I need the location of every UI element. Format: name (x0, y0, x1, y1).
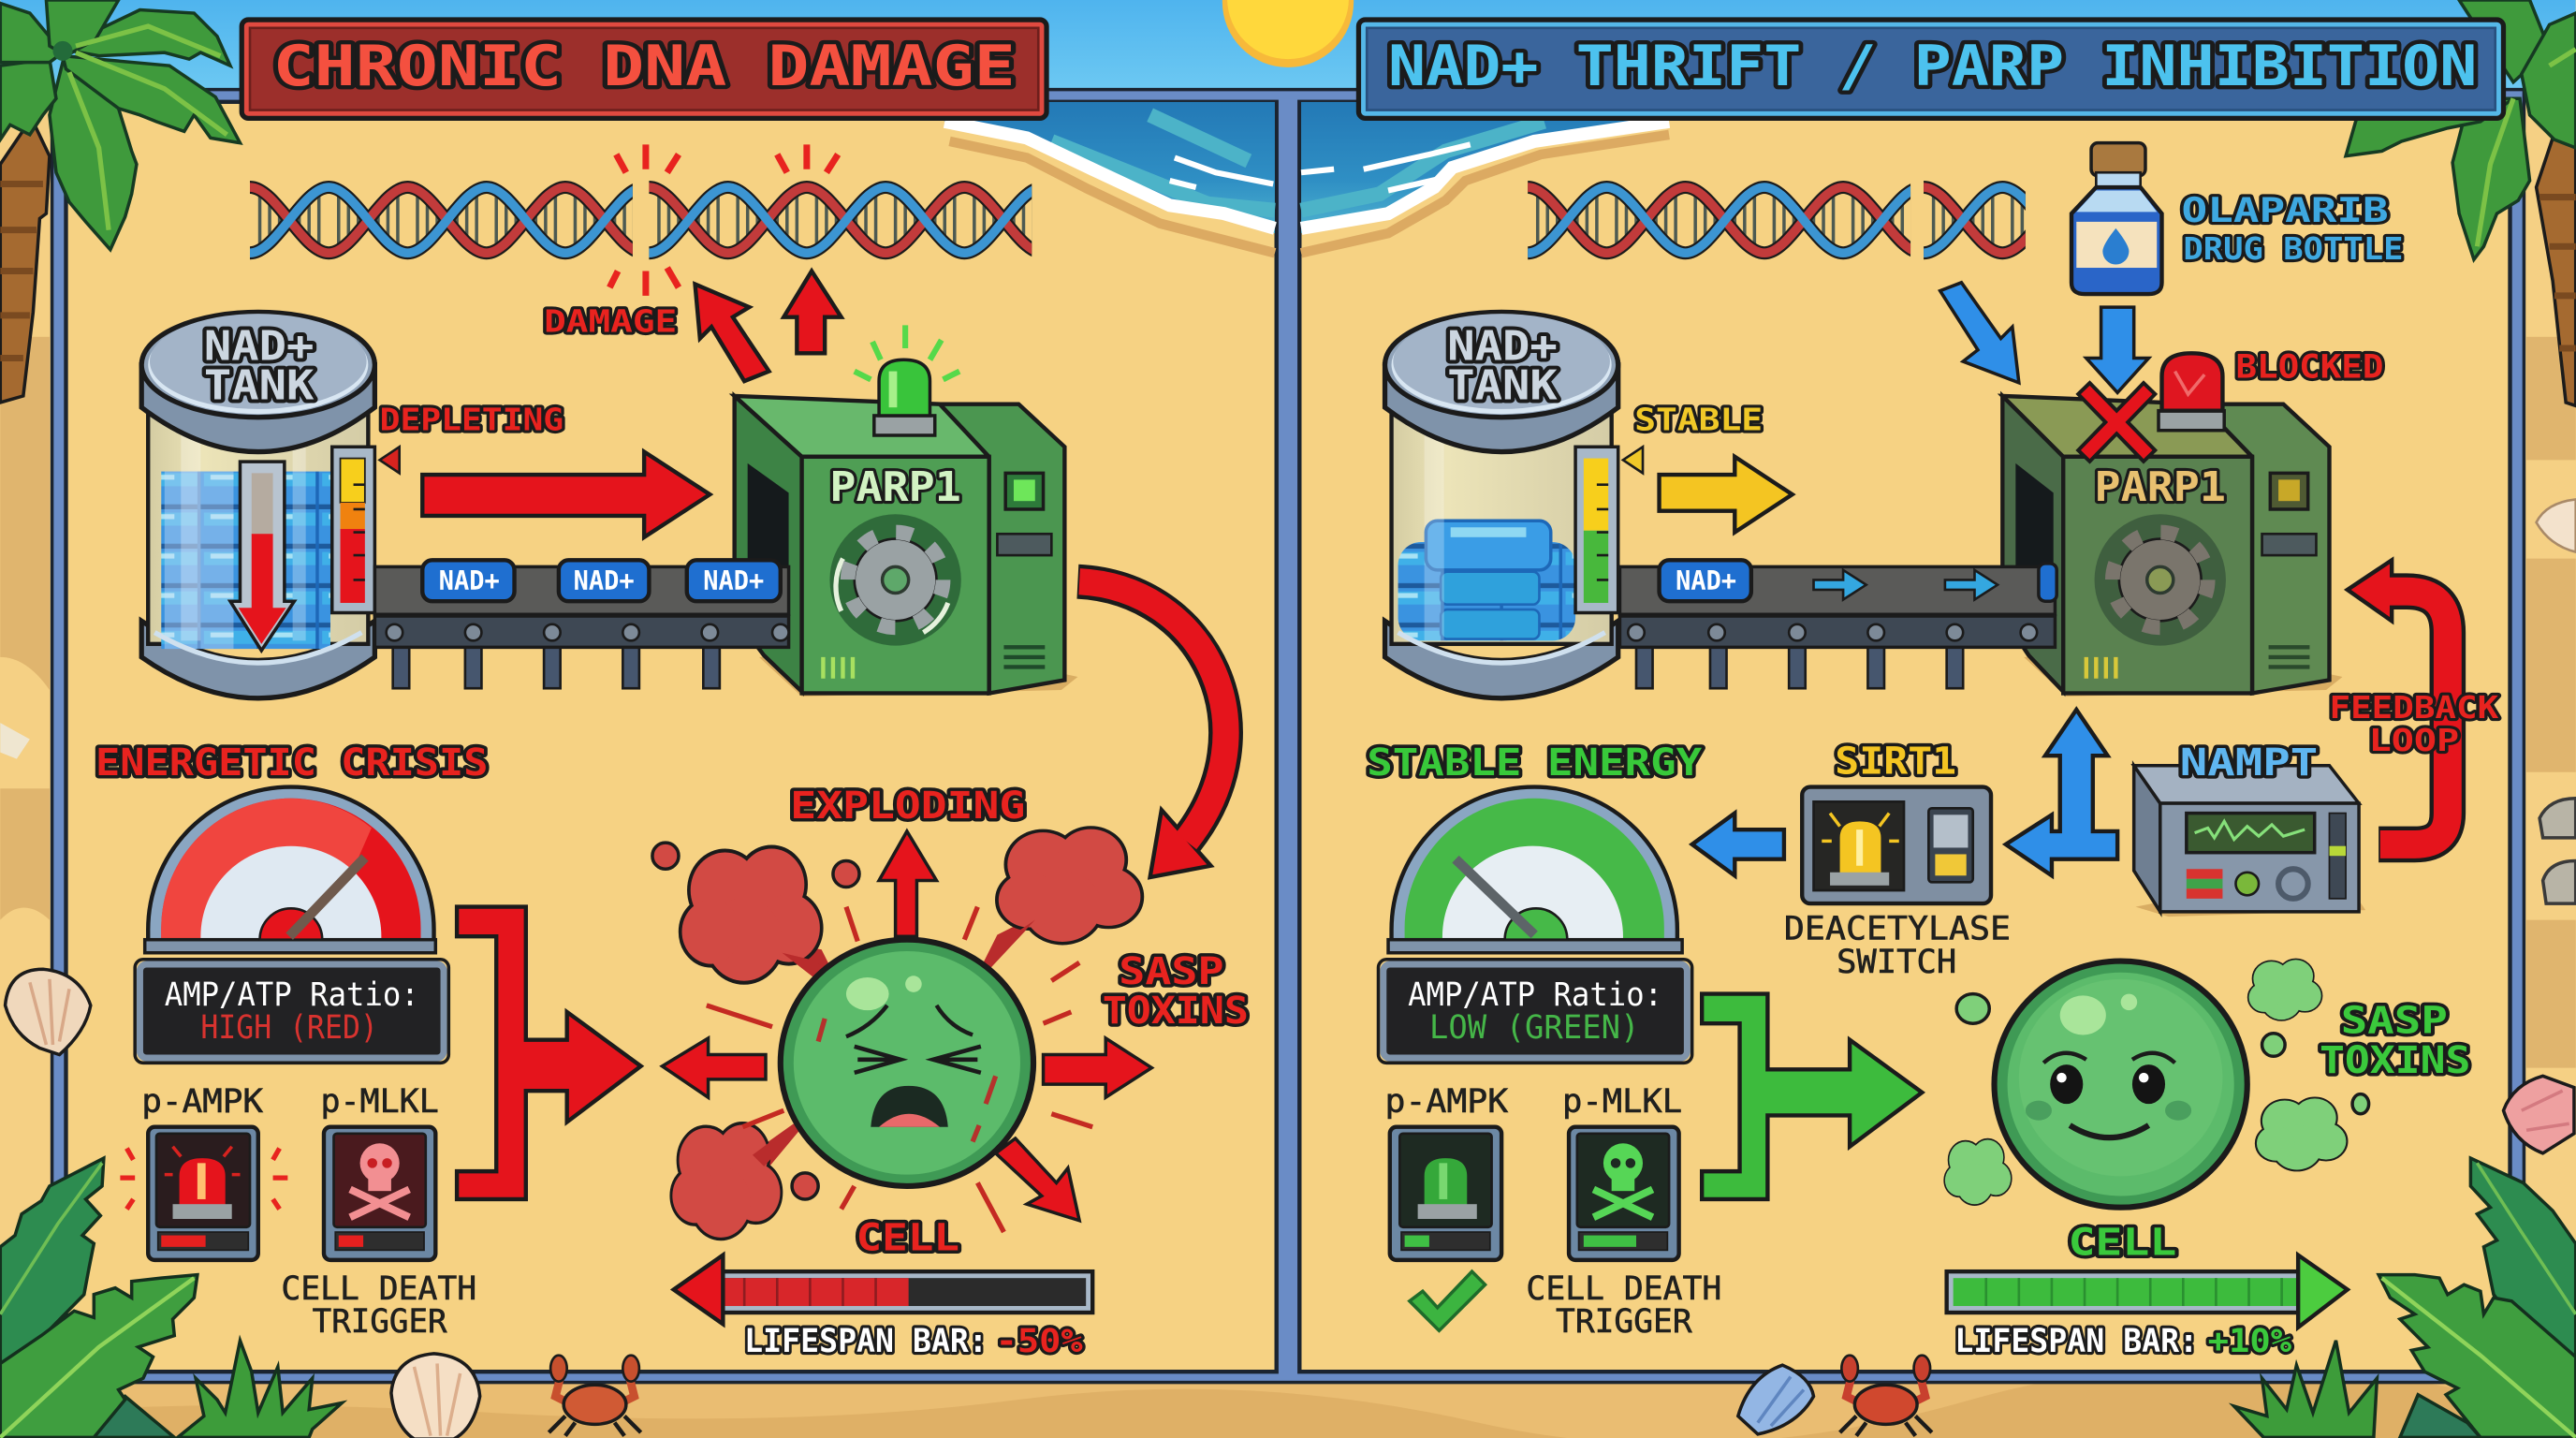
AMP/ATP readout: high: HIGH (RED) (200, 1008, 378, 1047)
bracket arrow: red (457, 907, 641, 1199)
lifespan bar: -50% (674, 1255, 1092, 1324)
lifespan bar: +10% (1947, 1255, 2348, 1328)
AMP/ATP readout: high (135, 960, 448, 1063)
label: stable: STABLE (1634, 402, 1763, 438)
foliage: bottom left (0, 1158, 342, 1437)
title: chronic DNA damage (242, 20, 1046, 118)
label: feedback loop: FEEDBACK (2329, 689, 2498, 726)
crab: left (549, 1356, 641, 1436)
label: SIRT1: SIRT1 (1835, 739, 1956, 783)
check mark (1410, 1271, 1486, 1330)
label: cell death trigger, right: CELL DEATH (1526, 1269, 1721, 1308)
label: stable energy: STABLE ENERGY (1367, 741, 1703, 785)
label: SASP toxins, left: TOXINS (1103, 989, 1249, 1033)
label: exploding: EXPLODING (790, 784, 1025, 828)
label: cell death trigger, right (1526, 1269, 1721, 1341)
title: NAD+ thrift / PARP inhibition: NAD+ THRIFT / PARP INHIBITION (1388, 35, 2477, 99)
NAMPT device (2134, 766, 2365, 917)
shell: bottom left (391, 1354, 480, 1438)
label: depleting: DEPLETING (380, 402, 564, 438)
label: p-MLKL: p-MLKL (320, 1082, 439, 1121)
skull card: p-MLKL green (1569, 1127, 1679, 1260)
PARP1 machine: active: PARP1 (829, 463, 961, 511)
conveyor belt: left (374, 566, 789, 688)
AMP/ATP gauge: high (145, 787, 435, 953)
PARP1 machine: blocked: PARP1 (2095, 463, 2226, 511)
palm tree: left (0, 0, 240, 403)
panel: NAD+ thrift / PARP inhibition (1299, 102, 2510, 1372)
label: feedback loop: LOOP (2369, 722, 2459, 758)
label: deacetylase switch (1784, 910, 2011, 981)
NAD+ tank: depleting: TANK (204, 361, 315, 409)
NAD+ tank: depleting (141, 312, 374, 698)
cell: healthy (1995, 961, 2247, 1208)
NAD+ pills: left (422, 560, 781, 601)
arrow: to DNA diagonal (695, 285, 769, 381)
label: lifespan -50%: LIFESPAN BAR: (744, 1322, 988, 1360)
label: damage: DAMAGE (544, 302, 677, 339)
stones: right edge (2539, 799, 2576, 903)
burst arrows from cell (662, 831, 1151, 1221)
crab: right (1840, 1356, 1932, 1436)
label: p-AMPK right: p-AMPK (1385, 1082, 1508, 1121)
label: cell death trigger, left (281, 1269, 476, 1341)
level gauge: stable (1575, 447, 1643, 613)
label: cell, left: CELL (856, 1215, 959, 1259)
curved arrow: PARP1 to cell (1077, 581, 1226, 877)
sun (1222, 0, 1354, 67)
skull card: p-MLKL red (324, 1127, 435, 1260)
label: olaparib drug bottle: DRUG BOTTLE (2183, 230, 2403, 267)
DNA helix: intact, right (1528, 181, 2026, 260)
cell: distressed (781, 940, 1033, 1186)
level gauge: depleting (332, 447, 400, 613)
green lamp on PARP1 (855, 325, 959, 435)
label: SASP toxins, right (2320, 999, 2470, 1082)
AMP/ATP readout: high: AMP/ATP Ratio: (165, 976, 419, 1014)
bracket arrow: green (1702, 994, 1922, 1199)
PARP1 machine: blocked (2002, 396, 2343, 697)
ocean shoreline (929, 102, 1676, 253)
shell: left edge (6, 969, 91, 1055)
label: cell, right: CELL (2068, 1221, 2176, 1265)
drug bottle: olaparib (2071, 143, 2162, 294)
label: cell death trigger, right: TRIGGER (1556, 1302, 1693, 1341)
label: energetic crisis: ENERGETIC CRISIS (95, 741, 488, 785)
T arrow: NAMPT to SIRT1 and PARP1 (2006, 710, 2117, 875)
NAD+ pills: left: NAD+ (574, 565, 635, 596)
label: cell death trigger, left: TRIGGER (313, 1302, 447, 1341)
arrow: drug to PARP1 diagonal (1940, 283, 2019, 383)
panel: chronic DNA damage (66, 102, 1277, 1372)
label: lifespan +10%: +10% (2208, 1322, 2291, 1360)
AMP/ATP gauge: low (1388, 787, 1682, 953)
label: deacetylase switch: SWITCH (1837, 943, 1956, 981)
feedback loop arrow (2348, 560, 2448, 844)
arrow: tank to PARP1 yellow (1660, 457, 1793, 533)
label: SASP toxins, left: SASP (1119, 949, 1224, 993)
NAD+ tank: depleting: NAD+ (204, 322, 314, 370)
foliage: bottom right (2234, 1158, 2576, 1437)
stone: left edge (0, 723, 30, 759)
label: olaparib drug bottle (2182, 190, 2403, 267)
red X: PARP1 blocked (2089, 394, 2144, 450)
SASP clouds: exploding (652, 829, 1140, 1238)
alarm card: p-AMPK red (120, 1127, 287, 1260)
damage sparks (609, 144, 838, 296)
label: blocked: BLOCKED (2235, 348, 2383, 387)
shell: pink right (2503, 1076, 2574, 1153)
arrow: to DNA up (783, 271, 842, 353)
AMP/ATP readout: low: AMP/ATP Ratio: (1408, 976, 1662, 1014)
label: lifespan -50%: -50% (996, 1322, 1083, 1360)
NAD+ pills: left: NAD+ (439, 565, 500, 596)
title: NAD+ thrift / PARP inhibition (1358, 20, 2503, 118)
label: olaparib drug bottle: OLAPARIB (2182, 190, 2389, 230)
alarm card: p-AMPK green (1390, 1127, 1501, 1260)
label: p-AMPK: p-AMPK (141, 1082, 263, 1121)
shell: blue (1738, 1365, 1814, 1434)
conveyor belt: right (1619, 566, 2055, 688)
label: deacetylase switch: DEACETYLASE (1784, 910, 2011, 948)
NAD+ tank: stable (1385, 312, 1618, 698)
label: NAMPT: NAMPT (2180, 741, 2318, 785)
SASP clouds: calm (1945, 960, 2369, 1204)
NAD+ pills: left: NAD+ (703, 565, 764, 596)
label: SASP toxins, right: SASP (2341, 999, 2448, 1043)
shell: beige right (2537, 499, 2576, 552)
PARP1 machine: active (735, 396, 1077, 697)
NAD+ tank: stable: NAD+ (1447, 322, 1558, 370)
NAD+ pill and flow arrows: right: NAD+ (1676, 565, 1736, 596)
red lamp: blocked (2159, 353, 2224, 431)
label: feedback loop (2329, 689, 2498, 758)
NAD+ pill and flow arrows: right (1660, 560, 2056, 601)
AMP/ATP readout: low (1379, 960, 1692, 1063)
title: chronic DNA damage: CHRONIC DNA DAMAGE (273, 35, 1016, 99)
AMP/ATP readout: low: LOW (GREEN) (1429, 1008, 1640, 1047)
label: cell death trigger, left: CELL DEATH (281, 1269, 476, 1308)
SIRT1 deacetylase switch (1802, 787, 1991, 903)
NAD+ tank: stable: TANK (1447, 361, 1558, 409)
label: p-MLKL right: p-MLKL (1562, 1082, 1682, 1121)
palm tree: right (2346, 0, 2576, 405)
arrow: SIRT1 to energy gauge (1692, 814, 1784, 875)
label: lifespan +10%: LIFESPAN BAR: (1954, 1322, 2198, 1360)
DNA helix: damaged, left (250, 187, 1044, 253)
label: SASP toxins, right: TOXINS (2320, 1038, 2470, 1082)
burst tick marks (707, 907, 1092, 1232)
arrow: tank to PARP1 (422, 452, 710, 537)
arrow: drug to PARP1 down (2086, 307, 2148, 392)
label: SASP toxins, left (1103, 949, 1249, 1033)
